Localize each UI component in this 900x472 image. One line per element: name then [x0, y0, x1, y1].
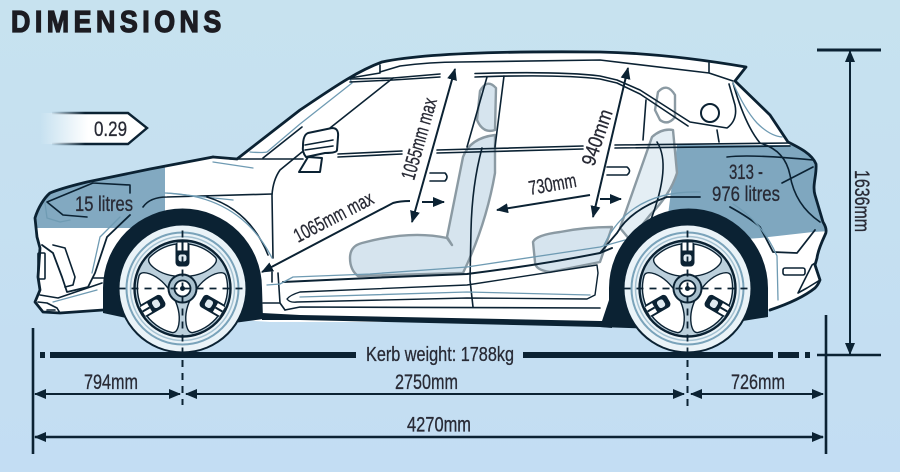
body lines [38, 60, 820, 313]
length dimensions: 4270mm [407, 414, 471, 436]
rear seat [533, 88, 677, 272]
front wheel [118, 224, 248, 354]
label: 730mm: 730mm [527, 170, 578, 200]
rear wheel [622, 224, 752, 354]
label: boot volume: 976 litres [712, 183, 780, 206]
title: DIMENSIONS [11, 5, 221, 39]
label: boot volume: 313 - [729, 161, 763, 184]
length dimensions: 794mm [84, 371, 138, 394]
label: 1055mm max: 1055mm max [398, 96, 442, 182]
front bumper outline [35, 157, 213, 313]
length dimensions: 2750mm [395, 371, 458, 394]
arrow: 730mm left [497, 195, 590, 210]
height dimension: 1636mm [850, 170, 873, 232]
fuel tank tint [36, 168, 165, 228]
front wheel arch [103, 209, 263, 330]
label: 940mm: 940mm [578, 107, 618, 169]
door mirror [299, 128, 338, 172]
label: 1065mm max: 1065mm max [290, 188, 377, 247]
sill [262, 313, 612, 328]
label: 15 litres: 15 litres [75, 193, 133, 216]
kerb weight line: Kerb weight: 1788kg [366, 343, 514, 366]
rear wheel arch [600, 208, 768, 330]
arrow: 730mm right [600, 198, 621, 200]
front seat [350, 84, 496, 276]
car body [35, 52, 826, 322]
arrow: 1055mm headroom [412, 69, 455, 222]
length dimensions [33, 315, 826, 454]
arrow: 1065mm end [422, 201, 444, 203]
arrow: 1065mm legroom [262, 201, 410, 272]
boot tint [668, 145, 830, 240]
length dimensions: 726mm [731, 371, 785, 394]
door handles [430, 173, 447, 181]
label: boot volume [712, 161, 780, 206]
drag coefficient arrow [40, 113, 147, 144]
headlight lines [47, 183, 272, 217]
arrow: 940mm rear headroom [593, 68, 628, 217]
body outline [213, 52, 826, 310]
drag coefficient arrow: 0.29 [94, 118, 127, 141]
car illustration [30, 52, 830, 354]
interior dimension arrows [262, 68, 628, 272]
